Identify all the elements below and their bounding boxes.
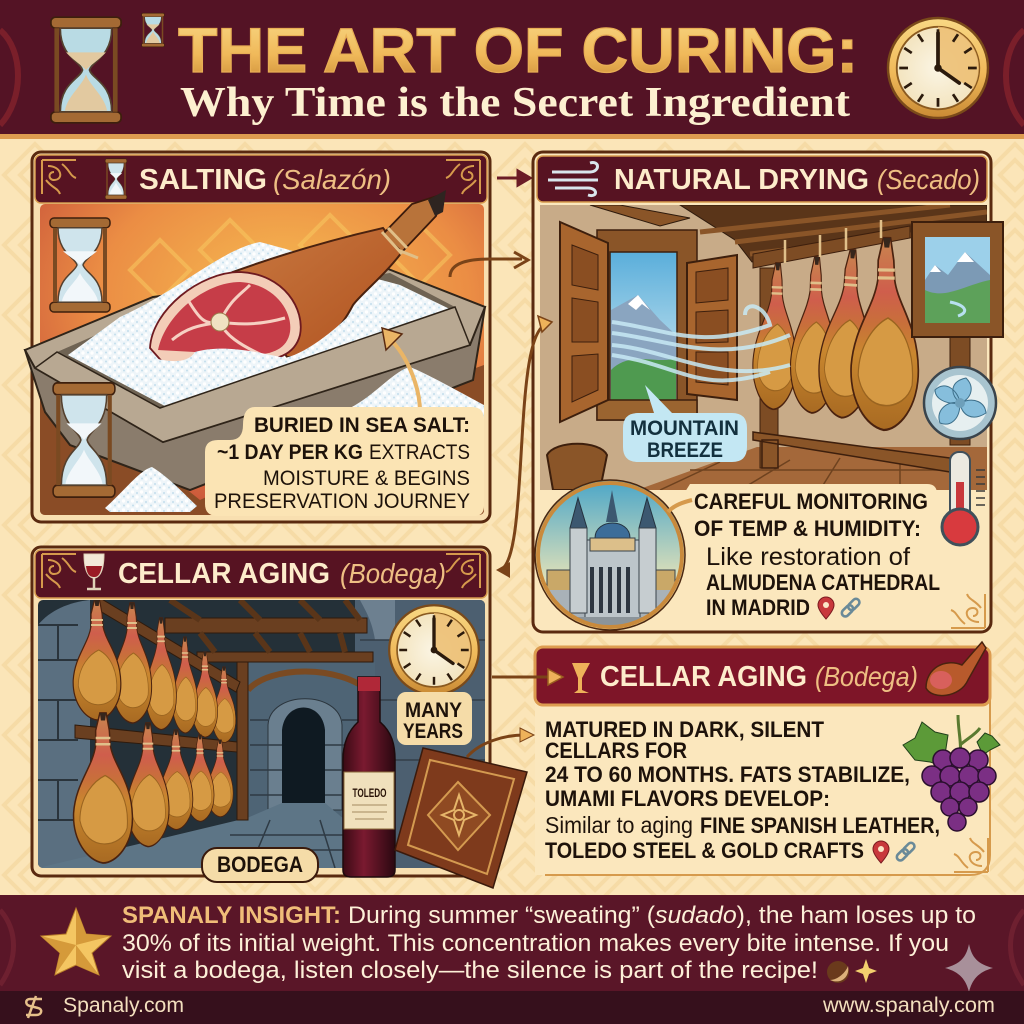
panel: cellar aging text: MATURED IN DARK, SILENT	[545, 717, 825, 742]
panel: cellar aging text: CELLARS FOR	[545, 738, 687, 763]
icon: link	[895, 841, 916, 862]
panel: cellar aging scene	[32, 547, 534, 888]
bench	[753, 432, 950, 472]
insight text: 30% of its initial weight. This concentration makes every bite intense. If you	[122, 930, 949, 957]
salt over ham	[68, 290, 456, 406]
leather cushion	[395, 748, 527, 888]
insight text	[122, 902, 976, 984]
logo mark	[26, 996, 42, 1018]
many years tag	[397, 692, 472, 745]
hourglass top	[50, 218, 110, 312]
callout: sea salt: BURIED IN SEA SALT:	[254, 414, 470, 437]
salting header: (Salazón)	[273, 164, 391, 195]
monitoring text block: CAREFUL MONITORING	[694, 489, 928, 514]
salt heap	[68, 242, 456, 406]
stone walls	[38, 600, 90, 868]
footer: www.spanaly.com	[822, 994, 995, 1017]
floor	[637, 447, 987, 490]
callout: sea salt: EXTRACTS	[369, 441, 470, 464]
beams	[165, 618, 373, 820]
rim front edge	[35, 307, 470, 442]
framed mountain picture	[912, 222, 1003, 337]
arrow: drying to cellar, double headed	[496, 316, 552, 578]
roundel connector	[668, 500, 692, 512]
callout: mountain breeze: MOUNTAIN	[630, 417, 739, 440]
salting header: SALTING	[139, 164, 267, 196]
hourglass bottom	[53, 383, 115, 497]
back wall and tunnel	[248, 662, 355, 818]
title: THE ART OF CURING:	[178, 16, 858, 86]
drying header: NATURAL DRYING	[614, 164, 869, 196]
monitoring text block: IN MADRID	[706, 595, 810, 620]
salt tub	[25, 307, 485, 490]
monitoring text block	[560, 484, 985, 625]
icon: thermometer	[942, 452, 985, 545]
icon: small hourglass	[142, 13, 164, 47]
salt mound right	[350, 367, 484, 420]
icon: small ham	[926, 642, 986, 696]
maturing header	[535, 642, 990, 705]
salting illustration	[25, 190, 485, 516]
salt pile left	[105, 467, 197, 512]
rail and posts	[753, 226, 970, 468]
arrow: salt to window	[450, 252, 528, 277]
panel: cellar aging text: 24 TO 60 MONTHS. FATS STABILIZE,	[545, 762, 910, 787]
cellar header	[35, 550, 487, 598]
barrel	[547, 444, 607, 490]
callout: sea salt	[205, 407, 484, 516]
icon: gold star	[41, 908, 111, 975]
arrow: cellar to maturing panel	[492, 669, 563, 685]
wine bottle: TOLEDO	[352, 786, 386, 800]
panel: cellar aging text: Similar to aging	[545, 812, 693, 838]
hanging hams, lower row	[74, 713, 233, 863]
header banner	[0, 0, 1024, 139]
insight text: visit a bodega, listen closely—the silence is part of the recipe!	[122, 957, 818, 984]
bodega tag: BODEGA	[217, 852, 303, 877]
panel: salting	[25, 152, 490, 522]
stone floor	[41, 803, 342, 868]
cellar header: CELLAR AGING	[118, 558, 330, 590]
monitoring text block: ALMUDENA CATHEDRAL	[706, 570, 940, 595]
panel: cellar aging text: TOLEDO STEEL & GOLD CRAFTS	[545, 838, 864, 863]
icon: cathedral roundel	[535, 480, 685, 632]
wine bottle	[343, 677, 395, 877]
icon: map pin	[818, 597, 834, 619]
drying room illustration	[540, 205, 1003, 490]
ceiling beams	[680, 205, 987, 262]
window with mountains	[560, 222, 737, 422]
icon: large hourglass	[51, 17, 121, 123]
icon: ham ball and sparkle	[827, 959, 877, 983]
maturing header: CELLAR AGING	[600, 661, 807, 693]
many years tag: YEARS	[403, 720, 463, 743]
icon: grapes	[903, 715, 1000, 831]
panel: cellar aging text: FINE SPANISH LEATHER,	[700, 813, 940, 838]
footer	[0, 991, 1024, 1024]
panel: cellar aging text	[535, 642, 1000, 875]
wall diamonds	[130, 215, 450, 300]
drying header: (Secado)	[877, 164, 980, 195]
breeze swirls	[612, 306, 790, 380]
icon: wine glass	[84, 554, 104, 589]
arrow: salt callout	[382, 328, 420, 412]
hanging hams, upper row	[73, 600, 236, 743]
decorative sparkle	[945, 944, 993, 992]
subtitle: Why Time is the Secret Ingredient	[180, 80, 850, 126]
wooden floor	[40, 365, 484, 515]
hanging hams	[751, 220, 921, 431]
arrow: leather to text	[467, 728, 534, 757]
bodega tag	[202, 848, 318, 882]
panel: natural drying	[533, 152, 1003, 632]
callout: mountain breeze	[623, 385, 747, 462]
monitoring text block: Like restoration of	[706, 543, 910, 571]
insight banner	[0, 895, 1024, 992]
icon: link	[840, 597, 861, 618]
icon: fan	[924, 367, 996, 439]
callout: sea salt: ~1 DAY PER KG	[217, 441, 363, 464]
drying header	[537, 156, 987, 202]
callout: sea salt: MOISTURE & BEGINS	[263, 467, 470, 490]
cellar header: (Bodega)	[340, 558, 446, 589]
monitoring text block: OF TEMP & HUMIDITY:	[694, 516, 921, 541]
many years tag: MANY	[405, 699, 462, 722]
insight text: SPANALY INSIGHT:	[122, 902, 341, 929]
icon: wall clock	[888, 18, 988, 118]
callout: sea salt: PRESERVATION JOURNEY	[214, 490, 470, 513]
maturing header: (Bodega)	[815, 661, 918, 692]
icon: cellar clock	[389, 605, 479, 695]
panel: cellar aging text: UMAMI FLAVORS DEVELOP:	[545, 786, 830, 811]
insight text: During summer “sweating” ( sudado), the ham loses up to	[348, 902, 976, 929]
ham in salt	[150, 190, 446, 365]
icon: map pin	[873, 841, 889, 863]
footer: Spanaly.com	[63, 994, 184, 1017]
callout: mountain breeze: BREEZE	[647, 439, 723, 462]
cellar illustration	[38, 598, 485, 868]
salting header	[35, 155, 487, 203]
arrow: salting to drying	[497, 171, 530, 185]
